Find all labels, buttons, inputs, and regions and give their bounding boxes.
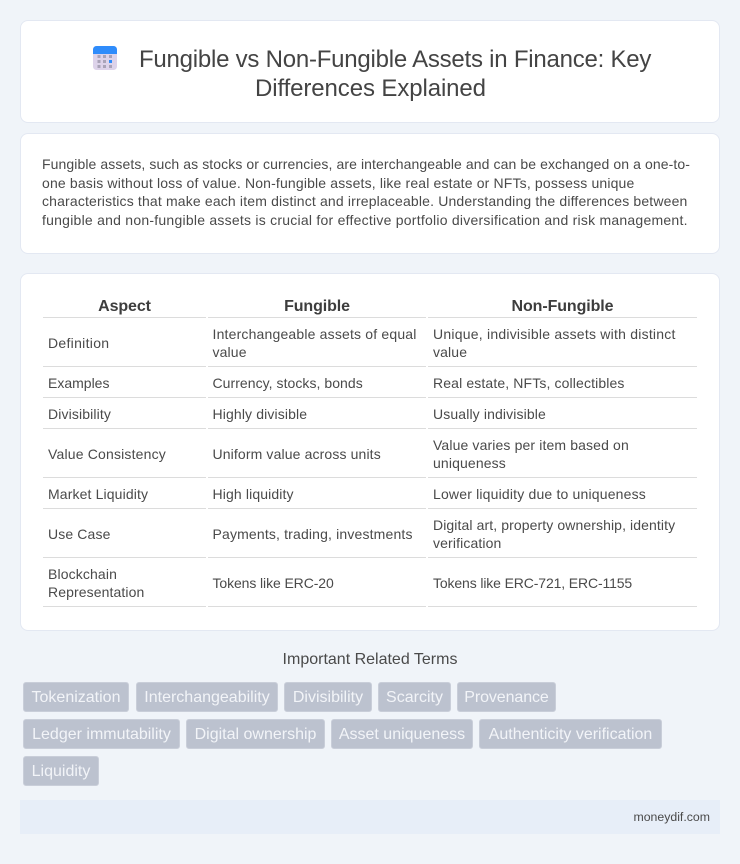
row: market liquidity	[48, 486, 646, 502]
title	[139, 46, 652, 102]
row: value consistency: Value varies per item based on	[433, 437, 629, 453]
tag	[479, 719, 662, 749]
tag	[331, 719, 473, 749]
row: market liquidity: Lower liquidity due to uniqueness	[433, 486, 646, 502]
row: definition: Definition	[48, 335, 109, 351]
row: divisibility: Highly divisible	[212, 406, 307, 422]
tag: Provenance	[464, 689, 549, 706]
row: blockchain representation: Blockchain	[48, 566, 117, 582]
tag	[378, 682, 451, 712]
icon: calendar	[93, 46, 117, 70]
row: use case: Use Case	[48, 526, 111, 542]
row: examples	[48, 375, 625, 391]
tag	[23, 719, 180, 749]
row: value consistency	[48, 437, 629, 471]
tag: Tokenization	[32, 689, 120, 706]
tag: Liquidity	[32, 763, 90, 780]
row: value consistency: Uniform value across units	[212, 446, 381, 462]
text block: introduction: fungible and non-fungible assets is crucial for effective portfolio diversification and risk management.	[42, 212, 688, 228]
row: definition: value	[212, 344, 247, 360]
row: value consistency: uniqueness	[433, 455, 506, 471]
text block: introduction	[42, 156, 690, 228]
row: definition	[48, 326, 676, 360]
tag: Divisibility	[293, 689, 363, 706]
text block: introduction: one basis without loss of value. Non-fungible assets, like real estate or NFTs, possess unique	[42, 175, 634, 191]
row: blockchain representation: Tokens like ERC-20	[212, 575, 334, 591]
tag	[457, 682, 556, 712]
row: divisibility	[48, 406, 546, 422]
row: blockchain representation: Representation	[48, 584, 144, 600]
table header: non-fungible: Non-Fungible	[512, 298, 613, 315]
tag: Scarcity	[386, 689, 443, 706]
tag: Asset uniqueness	[339, 726, 465, 743]
title: Fungible vs Non-Fungible Assets in Finance: Key	[139, 46, 651, 73]
row: examples: Examples	[48, 375, 109, 391]
text block: introduction: characteristics that make each item distinct and irreplaceable. Understanding the differences between	[42, 193, 687, 209]
table header: fungible: Fungible	[284, 298, 350, 315]
row: divisibility: Divisibility	[48, 406, 111, 422]
title: Differences Explained	[255, 75, 486, 102]
row: examples: Currency, stocks, bonds	[212, 375, 363, 391]
row: blockchain representation	[48, 566, 632, 600]
tag	[23, 756, 99, 786]
tag: Authenticity verification	[489, 726, 652, 743]
row: divisibility: Usually indivisible	[433, 406, 546, 422]
tags: related terms	[23, 682, 662, 786]
panel: introduction	[20, 133, 720, 254]
row: examples: Real estate, NFTs, collectibles	[433, 375, 625, 391]
table header: aspect: Aspect	[98, 298, 151, 315]
tag: Interchangeability	[144, 689, 270, 706]
row: market liquidity: High liquidity	[212, 486, 294, 502]
tag: Digital ownership	[195, 726, 316, 743]
row: use case	[48, 517, 676, 551]
row: use case: verification	[433, 535, 501, 551]
row: use case: Digital art, property ownership, identity	[433, 517, 675, 533]
row: value consistency: Value Consistency	[48, 446, 166, 462]
row: blockchain representation: Tokens like ERC-721, ERC-1155	[433, 575, 632, 591]
text block: introduction: Fungible assets, such as stocks or currencies, are interchangeable and can be exchanged on a one-to-	[42, 156, 690, 172]
tag	[284, 682, 372, 712]
footer bar	[20, 800, 720, 834]
heading: important related terms: Important Related Terms	[283, 651, 457, 668]
row: use case: Payments, trading, investments	[212, 526, 413, 542]
tag	[186, 719, 325, 749]
panel: comparison table	[20, 273, 720, 631]
row: definition: value	[433, 344, 467, 360]
table: comparison	[43, 298, 697, 607]
tag	[136, 682, 278, 712]
tag	[23, 682, 129, 712]
panel: title header	[20, 20, 720, 123]
row: market liquidity: Market Liquidity	[48, 486, 148, 502]
footer: source: moneydif.com	[633, 810, 710, 824]
tag: Ledger immutability	[32, 726, 171, 743]
row: definition: Interchangeable assets of equal	[212, 326, 417, 342]
row: definition: Unique, indivisible assets with distinct	[433, 326, 676, 342]
